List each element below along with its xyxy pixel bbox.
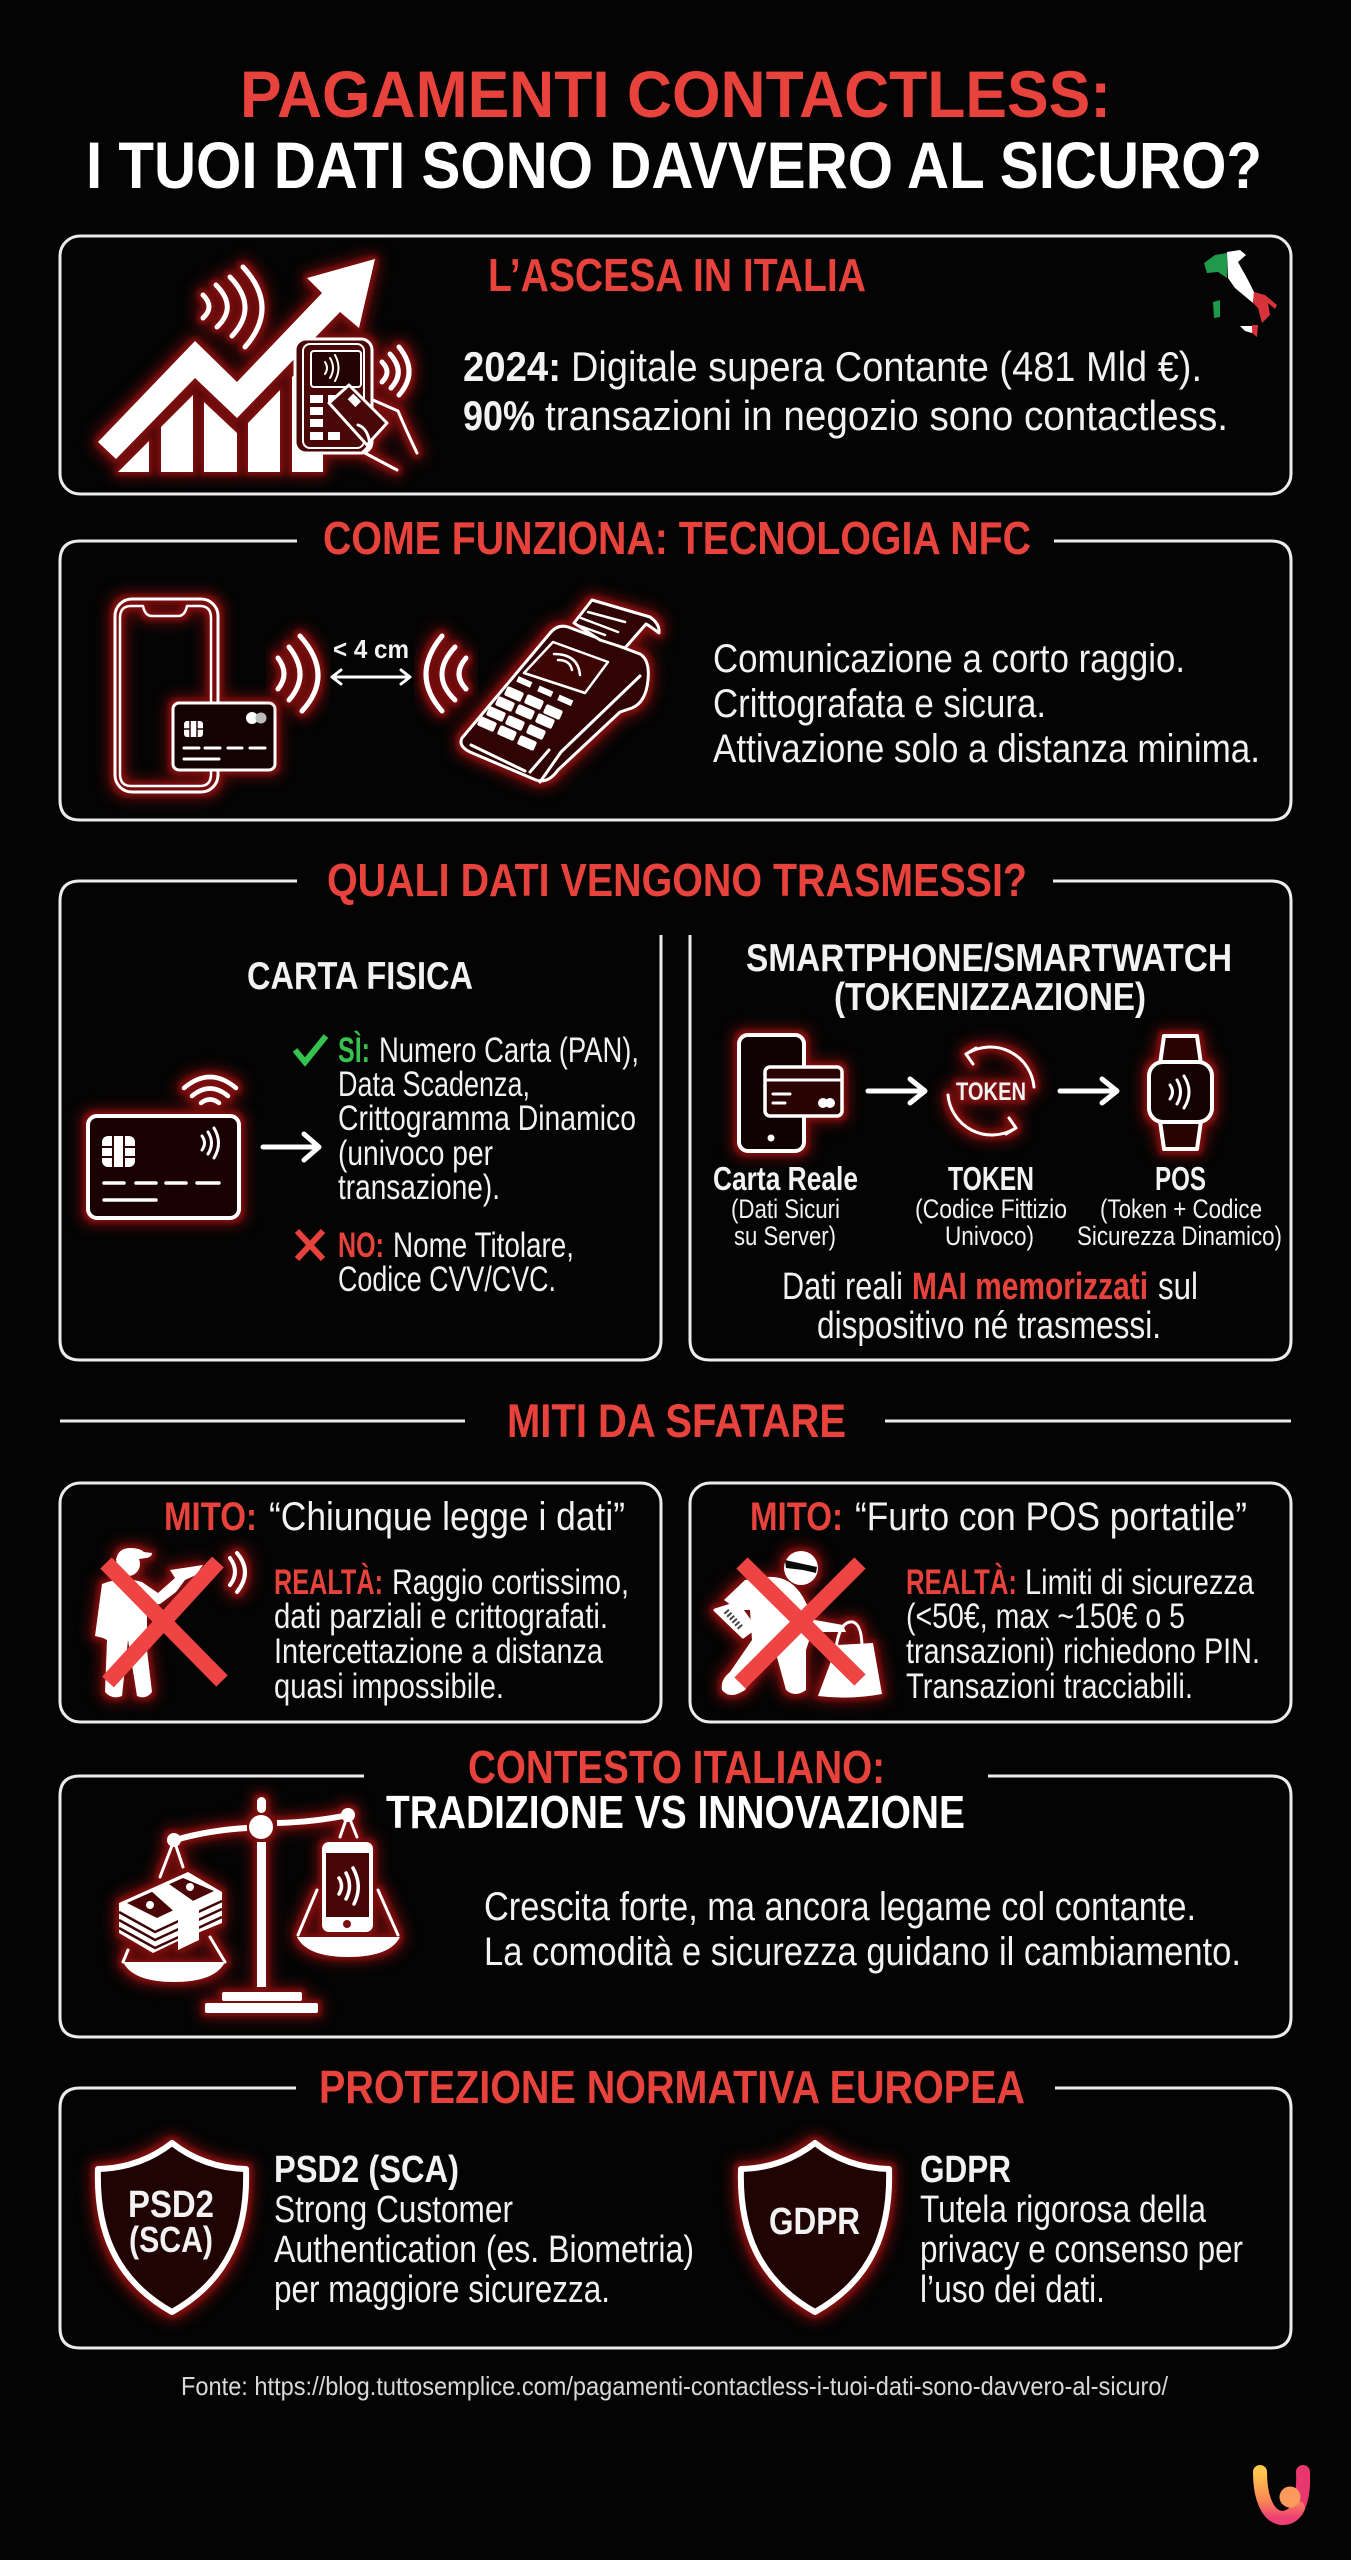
- panel: contesto italiano: [60, 1741, 1291, 2037]
- labels: token flow: Univoco): [945, 1221, 1034, 1251]
- list: data transmitted: transazione).: [338, 1168, 500, 1207]
- panel: myth 1: [60, 1483, 661, 1722]
- icon: PSD2 shield: (SCA): [129, 2219, 213, 2260]
- subheading: tokenizzazione: (TOKENIZZAZIONE): [834, 976, 1146, 1019]
- text: PSD2: per maggiore sicurezza.: [274, 2269, 610, 2311]
- text: PSD2: Authentication (es. Biometria): [274, 2229, 694, 2271]
- arrow: token to watch: [1060, 1079, 1117, 1103]
- icon: NFC waves left: [278, 636, 318, 711]
- text: context: La comodità e sicurezza guidano il cambiamento.: [484, 1930, 1241, 1974]
- text: growth facts: 2024:: [463, 343, 561, 390]
- myth statement: “Furto con POS portatile”: [855, 1495, 1247, 1539]
- list: data transmitted: Codice CVV/CVC.: [338, 1260, 556, 1299]
- reality text: quasi impossibile.: [274, 1667, 504, 1706]
- reality text: Transazioni tracciabili.: [906, 1667, 1193, 1706]
- labels: token flow: Carta Reale: [713, 1160, 858, 1197]
- icon: POS terminal: [461, 600, 659, 782]
- subheading: tokenizzazione: SMARTPHONE/SMARTWATCH: [746, 937, 1232, 980]
- list: data transmitted: Numero Carta (PAN),: [379, 1031, 639, 1070]
- label: distance: < 4 cm: [333, 634, 409, 664]
- panel: quali dati vengono trasmessi: [60, 854, 1291, 1360]
- reality text: transazioni) richiedono PIN.: [906, 1632, 1260, 1671]
- text: token note: dispositivo né trasmessi.: [817, 1305, 1161, 1347]
- list: data transmitted: Data Scadenza,: [338, 1065, 530, 1104]
- heading: PROTEZIONE NORMATIVA EUROPEA: [319, 2061, 1025, 2113]
- heading: [386, 1741, 965, 1838]
- text: token note: MAI memorizzati: [912, 1266, 1148, 1308]
- list: data transmitted: Nome Titolare,: [393, 1226, 574, 1265]
- icon: Italy map: [1204, 250, 1277, 337]
- text: PSD2: [274, 2149, 694, 2311]
- icon: phone and card: [115, 599, 275, 792]
- list: data transmitted: Crittogramma Dinamico: [338, 1099, 636, 1138]
- heading: miti da sfatare: MITI DA SFATARE: [507, 1394, 846, 1447]
- reality text: Limiti di sicurezza: [1025, 1563, 1254, 1602]
- labels: token flow: POS: [1155, 1160, 1206, 1197]
- icon: person with reader crossed out: [95, 1548, 245, 1697]
- text: GDPR: privacy e consenso per: [920, 2229, 1243, 2271]
- icon: cross: [297, 1231, 323, 1259]
- panel: myth 2: [690, 1483, 1291, 1722]
- text: GDPR: l’uso dei dati.: [920, 2269, 1105, 2311]
- title: [86, 57, 1262, 202]
- icon: PSD2 shield: PSD2: [128, 2184, 214, 2226]
- text: token note: sul: [1158, 1266, 1198, 1308]
- labels: token flow: Sicurezza Dinamico): [1077, 1221, 1282, 1251]
- heading: L’ASCESA IN ITALIA: [488, 249, 866, 301]
- text: NFC description: Comunicazione a corto raggio.: [713, 637, 1185, 681]
- text: growth facts: Digitale supera Contante (481 Mld €).: [571, 343, 1202, 390]
- reality text: REALTÀ:: [906, 1562, 1017, 1602]
- icon: PSD2 shield: [98, 2143, 246, 2312]
- text: PSD2: Strong Customer: [274, 2189, 513, 2231]
- list: data transmitted: SÌ:: [338, 1030, 370, 1070]
- reality text: (<50€, max ~150€ o 5: [906, 1597, 1185, 1636]
- icon: physical card: [88, 1077, 239, 1218]
- icon: thief crossed out: [715, 1551, 882, 1698]
- icon: GDPR shield: [741, 2143, 889, 2312]
- arrow: card to data: [263, 1134, 319, 1160]
- icon: check: [295, 1036, 326, 1062]
- text: GDPR: GDPR: [920, 2149, 1011, 2191]
- text: context: Crescita forte, ma ancora legame col contante.: [484, 1885, 1196, 1929]
- source line: Fonte: https://blog.tuttosemplice.com/pagamenti-contactless-i-tuoi-dati-sono-davvero-al-sicuro/: [181, 2371, 1169, 2401]
- myth statement: MITO:: [164, 1495, 257, 1539]
- arrow: double distance: [332, 670, 410, 684]
- icon: phone with card: [739, 1035, 842, 1151]
- panel: l'ascesa in Italia: [60, 236, 1291, 494]
- heading: CONTESTO ITALIANO:: [468, 1741, 885, 1793]
- reality text: [906, 1562, 1260, 1706]
- text: token note: Dati reali: [782, 1266, 903, 1308]
- text: NFC description: [713, 637, 1260, 771]
- icon: GDPR shield: GDPR: [769, 2201, 860, 2243]
- icon: token cycle: TOKEN: [956, 1078, 1026, 1106]
- logo: [1260, 2472, 1303, 2518]
- icon: token cycle: [948, 1047, 1034, 1135]
- subheading: tokenizzazione: [746, 937, 1232, 1019]
- labels: token flow: (Codice Fittizio: [915, 1194, 1067, 1224]
- heading: TRADIZIONE VS INNOVAZIONE: [386, 1786, 965, 1838]
- reality text: Raggio cortissimo,: [392, 1563, 629, 1602]
- myth statement: MITO:: [750, 1495, 843, 1539]
- list: data transmitted: (univoco per: [338, 1134, 493, 1173]
- icon: growth chart with POS: [98, 259, 417, 472]
- reality text: REALTÀ:: [274, 1562, 383, 1602]
- myth statement: “Chiunque legge i dati”: [269, 1495, 625, 1539]
- text: GDPR: Tutela rigorosa della: [920, 2189, 1207, 2231]
- text: context: [484, 1885, 1241, 1974]
- text: growth facts: [463, 343, 1228, 439]
- text: token note: [782, 1266, 1198, 1347]
- reality text: dati parziali e crittografati.: [274, 1597, 608, 1636]
- icon: smartwatch: [1149, 1036, 1212, 1149]
- icon: NFC waves right: [426, 636, 466, 711]
- heading: QUALI DATI VENGONO TRASMESSI?: [327, 854, 1027, 906]
- heading: COME FUNZIONA: TECNOLOGIA NFC: [323, 512, 1031, 564]
- list: data transmitted: NO:: [338, 1226, 384, 1265]
- labels: token flow: TOKEN: [948, 1160, 1034, 1197]
- subheading: carta fisica: CARTA FISICA: [247, 955, 473, 998]
- reality text: Intercettazione a distanza: [274, 1632, 603, 1671]
- text: growth facts: 90%: [463, 392, 535, 439]
- panel: protezione normativa europea: [60, 2061, 1291, 2348]
- labels: token flow: (Dati Sicuri: [731, 1194, 840, 1224]
- panel: come funziona NFC: [60, 512, 1291, 820]
- labels: token flow: su Server): [734, 1221, 836, 1251]
- text: GDPR: [920, 2149, 1243, 2311]
- list: data transmitted: [295, 1030, 639, 1299]
- labels: token flow: [713, 1160, 1282, 1251]
- labels: token flow: (Token + Codice: [1100, 1194, 1262, 1224]
- reality text: [274, 1562, 629, 1706]
- text: NFC description: Crittografata e sicura.: [713, 682, 1046, 726]
- text: PSD2: PSD2 (SCA): [274, 2149, 459, 2191]
- text: growth facts: transazioni in negozio sono contactless.: [545, 392, 1228, 439]
- icon: balance scale: [119, 1797, 400, 2013]
- text: NFC description: Attivazione solo a distanza minima.: [713, 727, 1260, 771]
- arrow: phone to token: [868, 1079, 925, 1103]
- title: PAGAMENTI CONTACTLESS:: [240, 57, 1111, 131]
